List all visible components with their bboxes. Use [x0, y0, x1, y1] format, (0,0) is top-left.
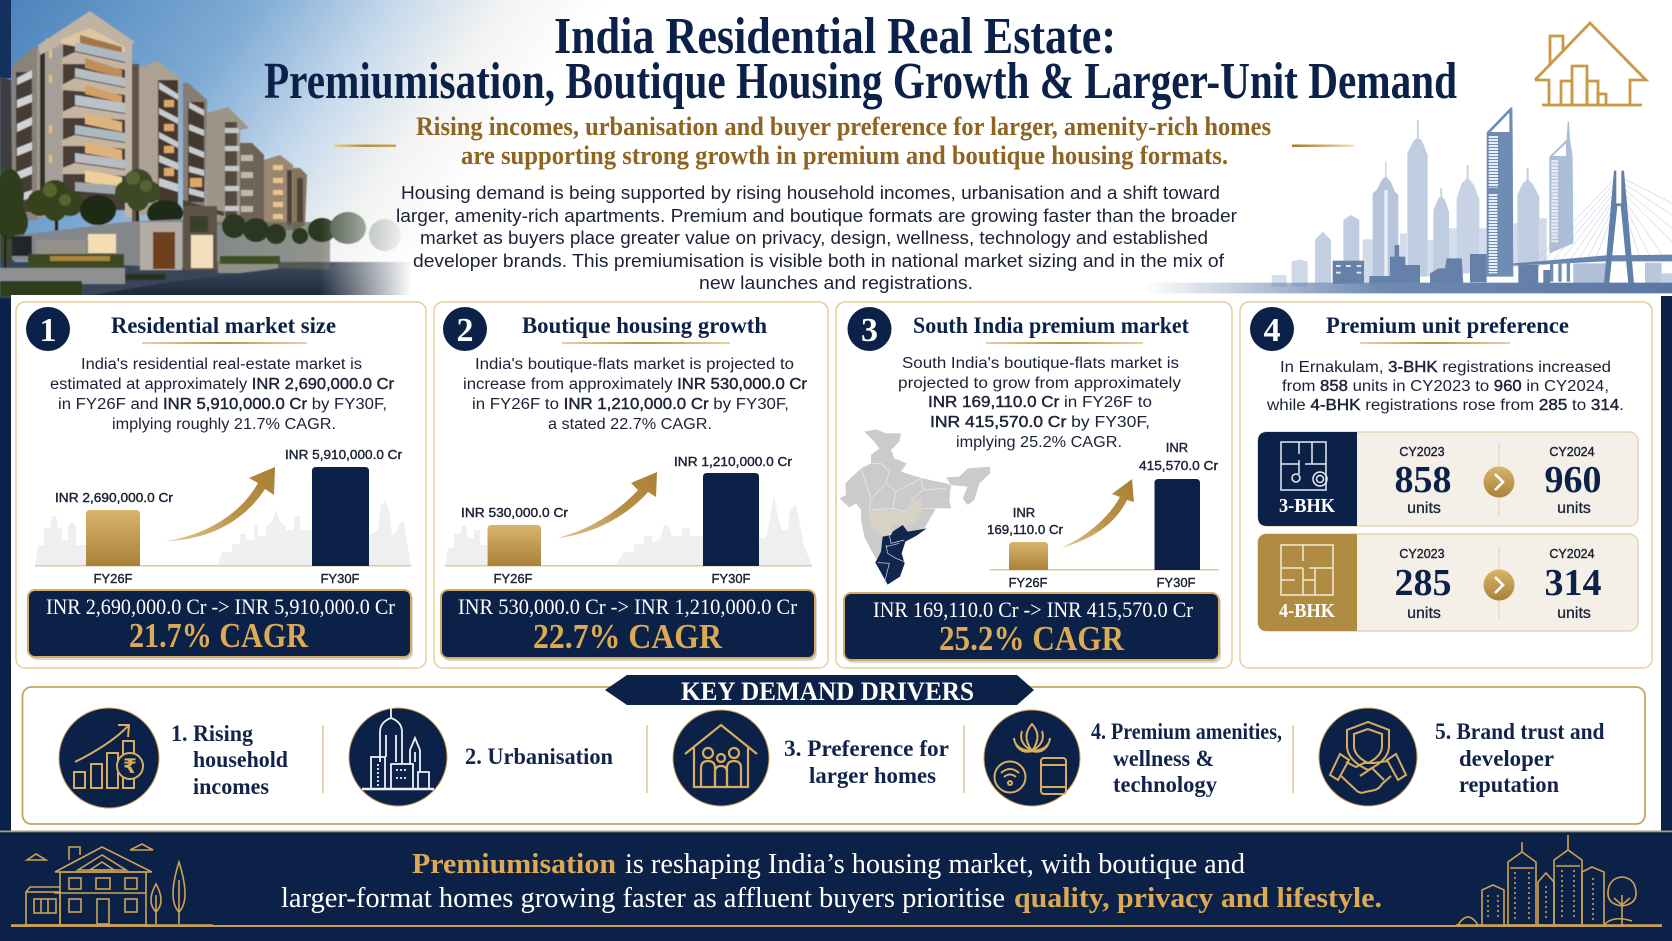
main block	[12, 48, 38, 220]
closing statement: larger-format homes growing faster as affluent buyers prioritise	[281, 883, 1005, 914]
icon: larger homes	[673, 710, 769, 806]
balcony floors	[62, 35, 127, 195]
number badge 2: 2	[456, 312, 474, 349]
panel: South India premium market	[836, 302, 1232, 668]
bridge cables	[1537, 178, 1672, 260]
bar chart: 169,110.0 Cr	[987, 522, 1064, 537]
heading: South India premium market	[913, 313, 1189, 338]
icon: rising incomes: ₹	[123, 754, 137, 778]
bar chart: FY30F	[1156, 575, 1196, 590]
growth arrow	[557, 472, 657, 538]
card: 4-BHK: 314	[1544, 562, 1602, 604]
CAGR callout	[441, 590, 817, 661]
description: in FY26F and INR 5,910,000.0 Cr by FY30F,	[58, 396, 387, 413]
icon: 4-BHK floor plan	[1281, 545, 1333, 595]
number badge 3: 3	[861, 312, 878, 349]
logo icon: gold house	[1535, 23, 1646, 105]
label	[784, 736, 949, 788]
bar chart: FY26F	[93, 571, 133, 586]
bar chart: INR 530,000.0 Cr	[461, 505, 569, 520]
bar chart	[987, 440, 1219, 590]
card: 3-BHK: 858	[1394, 459, 1452, 501]
driver 2	[349, 706, 613, 806]
photo: residential buildings	[0, 10, 409, 298]
label: wellness &	[1113, 746, 1214, 771]
driver 1	[59, 708, 288, 808]
number badge 1	[26, 307, 70, 351]
label: household	[193, 747, 288, 772]
heading: Boutique housing growth	[522, 313, 767, 338]
heading banner	[605, 675, 1034, 706]
growth arrow	[166, 467, 275, 541]
label	[171, 721, 288, 799]
street trees	[215, 222, 330, 270]
CAGR callout: INR 169,110.0 Cr -> INR 415,570.0 Cr	[873, 597, 1194, 622]
closing statement	[281, 849, 1382, 914]
map of India highlighting the south	[839, 429, 990, 585]
description: INR 169,110.0 Cr in FY26F to	[928, 394, 1152, 411]
card: 4-BHK	[1258, 534, 1638, 631]
intro paragraph: new launches and registrations.	[699, 272, 973, 293]
intro paragraph: developer brands. This premiumisation is visible both in national market sizing and in the mix of	[413, 250, 1225, 271]
label: developer	[1459, 746, 1554, 771]
label: 2. Urbanisation	[465, 744, 613, 769]
panel: residential market size	[16, 302, 426, 668]
footer banner	[0, 830, 1672, 941]
panel: key demand drivers	[22, 675, 1645, 824]
number badge 4	[1250, 307, 1294, 351]
description: projected to grow from approximately	[898, 375, 1181, 392]
CAGR callout: 21.7% CAGR	[129, 616, 309, 655]
number badge 2	[443, 307, 487, 351]
description: estimated at approximately INR 2,690,000.0 Cr	[50, 376, 394, 393]
title	[264, 8, 1457, 110]
number badge 1: 1	[40, 312, 56, 349]
label: 1. Rising	[171, 721, 253, 746]
CAGR callout: INR 2,690,000.0 Cr -> INR 5,910,000.0 Cr	[46, 594, 396, 619]
label: incomes	[193, 774, 269, 799]
label: technology	[1113, 772, 1217, 797]
description: implying roughly 21.7% CAGR.	[112, 416, 336, 433]
card: 3-BHK: CY2024	[1549, 445, 1595, 459]
subtitle: Rising incomes, urbanisation and buyer preference for larger, amenity-rich homes	[416, 112, 1271, 141]
growth arrow	[1061, 479, 1134, 548]
closing statement: Premiumisation	[412, 849, 616, 880]
description: In Ernakulam, 3-BHK registrations increased	[1280, 359, 1611, 376]
closing statement: is reshaping India’s housing market, with boutique and	[625, 849, 1245, 880]
description: implying 25.2% CAGR.	[956, 434, 1122, 451]
driver 4	[984, 710, 1282, 806]
icon: amenities, wellness, technology	[984, 710, 1080, 806]
label: larger homes	[809, 763, 936, 788]
description: while 4-BHK registrations rose from 285 to 314.	[1266, 397, 1624, 414]
bar chart: INR	[1166, 440, 1188, 455]
card: 4-BHK: CY2024	[1549, 547, 1595, 561]
label: 4. Premium amenities,	[1091, 719, 1282, 744]
label: reputation	[1459, 772, 1559, 797]
card: 3-BHK: units	[1557, 500, 1591, 517]
panel: premium unit preference	[1240, 302, 1652, 668]
main white area	[11, 295, 1661, 832]
icon: gold city skyline	[1456, 835, 1662, 925]
icon: gold house	[11, 844, 213, 925]
card: 3-BHK: CY2023	[1399, 445, 1445, 459]
description: a stated 22.7% CAGR.	[548, 416, 712, 433]
card: 4-BHK: CY2023	[1399, 547, 1445, 561]
CAGR callout	[844, 593, 1221, 663]
bar chart: INR 2,690,000.0 Cr	[55, 490, 174, 505]
description	[463, 356, 807, 433]
label	[1435, 719, 1605, 797]
description	[1266, 359, 1624, 414]
number badge 3	[848, 307, 892, 351]
description: from 858 units in CY2023 to 960 in CY2024,	[1282, 378, 1609, 395]
icon: chevron	[1484, 466, 1514, 498]
podium	[12, 219, 183, 268]
bar chart: INR 5,910,000.0 Cr	[285, 447, 403, 462]
title: India Residential Real Estate:	[554, 8, 1116, 65]
far blocks	[264, 155, 293, 230]
subtitle	[334, 112, 1354, 170]
card: 3-BHK: units	[1407, 500, 1441, 517]
label: 3. Preference for	[784, 736, 949, 761]
bar chart: INR 1,210,000.0 Cr	[674, 454, 793, 469]
heading banner: KEY DEMAND DRIVERS	[681, 677, 974, 706]
driver 3	[673, 710, 949, 806]
icon: rising incomes	[59, 708, 159, 808]
header band	[0, 0, 1672, 296]
CAGR callout: 22.7% CAGR	[533, 617, 723, 656]
bar chart	[35, 447, 411, 586]
icon: chevron	[1484, 570, 1514, 600]
description: India's boutique-flats market is projected to	[475, 356, 794, 373]
bar chart	[445, 454, 812, 586]
description: increase from approximately INR 530,000.0 Cr	[463, 376, 807, 393]
icon: 3-BHK floor plan	[1281, 442, 1327, 490]
intro paragraph: larger, amenity-rich apartments. Premium and boutique formats are growing faster than the broader	[396, 205, 1237, 226]
label	[1091, 719, 1282, 797]
CAGR callout: INR 530,000.0 Cr -> INR 1,210,000.0 Cr	[458, 594, 798, 619]
description	[50, 356, 394, 433]
foreground dark blocks	[1333, 245, 1550, 284]
closing statement: quality, privacy and lifestyle.	[1014, 883, 1382, 914]
CAGR callout: 25.2% CAGR	[939, 619, 1125, 658]
subtitle: are supporting strong growth in premium and boutique housing formats.	[461, 141, 1228, 170]
bar chart: FY26F	[1008, 575, 1048, 590]
skyline illustration	[1143, 107, 1672, 293]
card: 3-BHK	[1258, 432, 1638, 526]
description: INR 415,570.0 Cr by FY30F,	[930, 414, 1150, 431]
heading: Residential market size	[111, 313, 336, 338]
card: 4-BHK: 285	[1394, 562, 1452, 604]
driver 5	[1319, 708, 1605, 806]
bar chart: 415,570.0 Cr	[1139, 458, 1219, 473]
trees behind podium	[136, 210, 140, 222]
bar chart: FY30F	[320, 571, 360, 586]
card: 3-BHK: 3-BHK	[1279, 495, 1335, 517]
bar chart: INR	[1013, 505, 1035, 520]
intro paragraph: Housing demand is being supported by rising household incomes, urbanisation and a shift toward	[401, 182, 1220, 203]
panel: boutique housing growth	[434, 302, 828, 668]
number badge 4: 4	[1264, 312, 1280, 349]
description: South India's boutique-flats market is	[902, 355, 1179, 372]
card: 4-BHK: units	[1557, 605, 1591, 622]
icon: brand trust handshake	[1319, 708, 1417, 806]
intro paragraph	[396, 182, 1237, 293]
bar chart: FY26F	[493, 571, 533, 586]
icon: urbanisation	[349, 706, 447, 806]
label: 5. Brand trust and	[1435, 719, 1605, 744]
description: in FY26F to INR 1,210,000.0 Cr by FY30F,	[472, 396, 789, 413]
card: 4-BHK: units	[1407, 605, 1441, 622]
card: 3-BHK: 960	[1544, 459, 1602, 501]
description	[898, 355, 1181, 451]
bar chart: FY30F	[711, 571, 751, 586]
far left building edge	[0, 76, 12, 170]
CAGR callout	[28, 590, 413, 660]
description: India's residential real-estate market is	[81, 356, 362, 373]
card: 4-BHK: 4-BHK	[1279, 600, 1335, 622]
planters and hedges	[28, 254, 124, 269]
road	[92, 268, 388, 295]
intro paragraph: market as buyers place greater value on privacy, design, wellness, technology and established	[420, 227, 1208, 248]
heading: Premium unit preference	[1326, 313, 1569, 338]
